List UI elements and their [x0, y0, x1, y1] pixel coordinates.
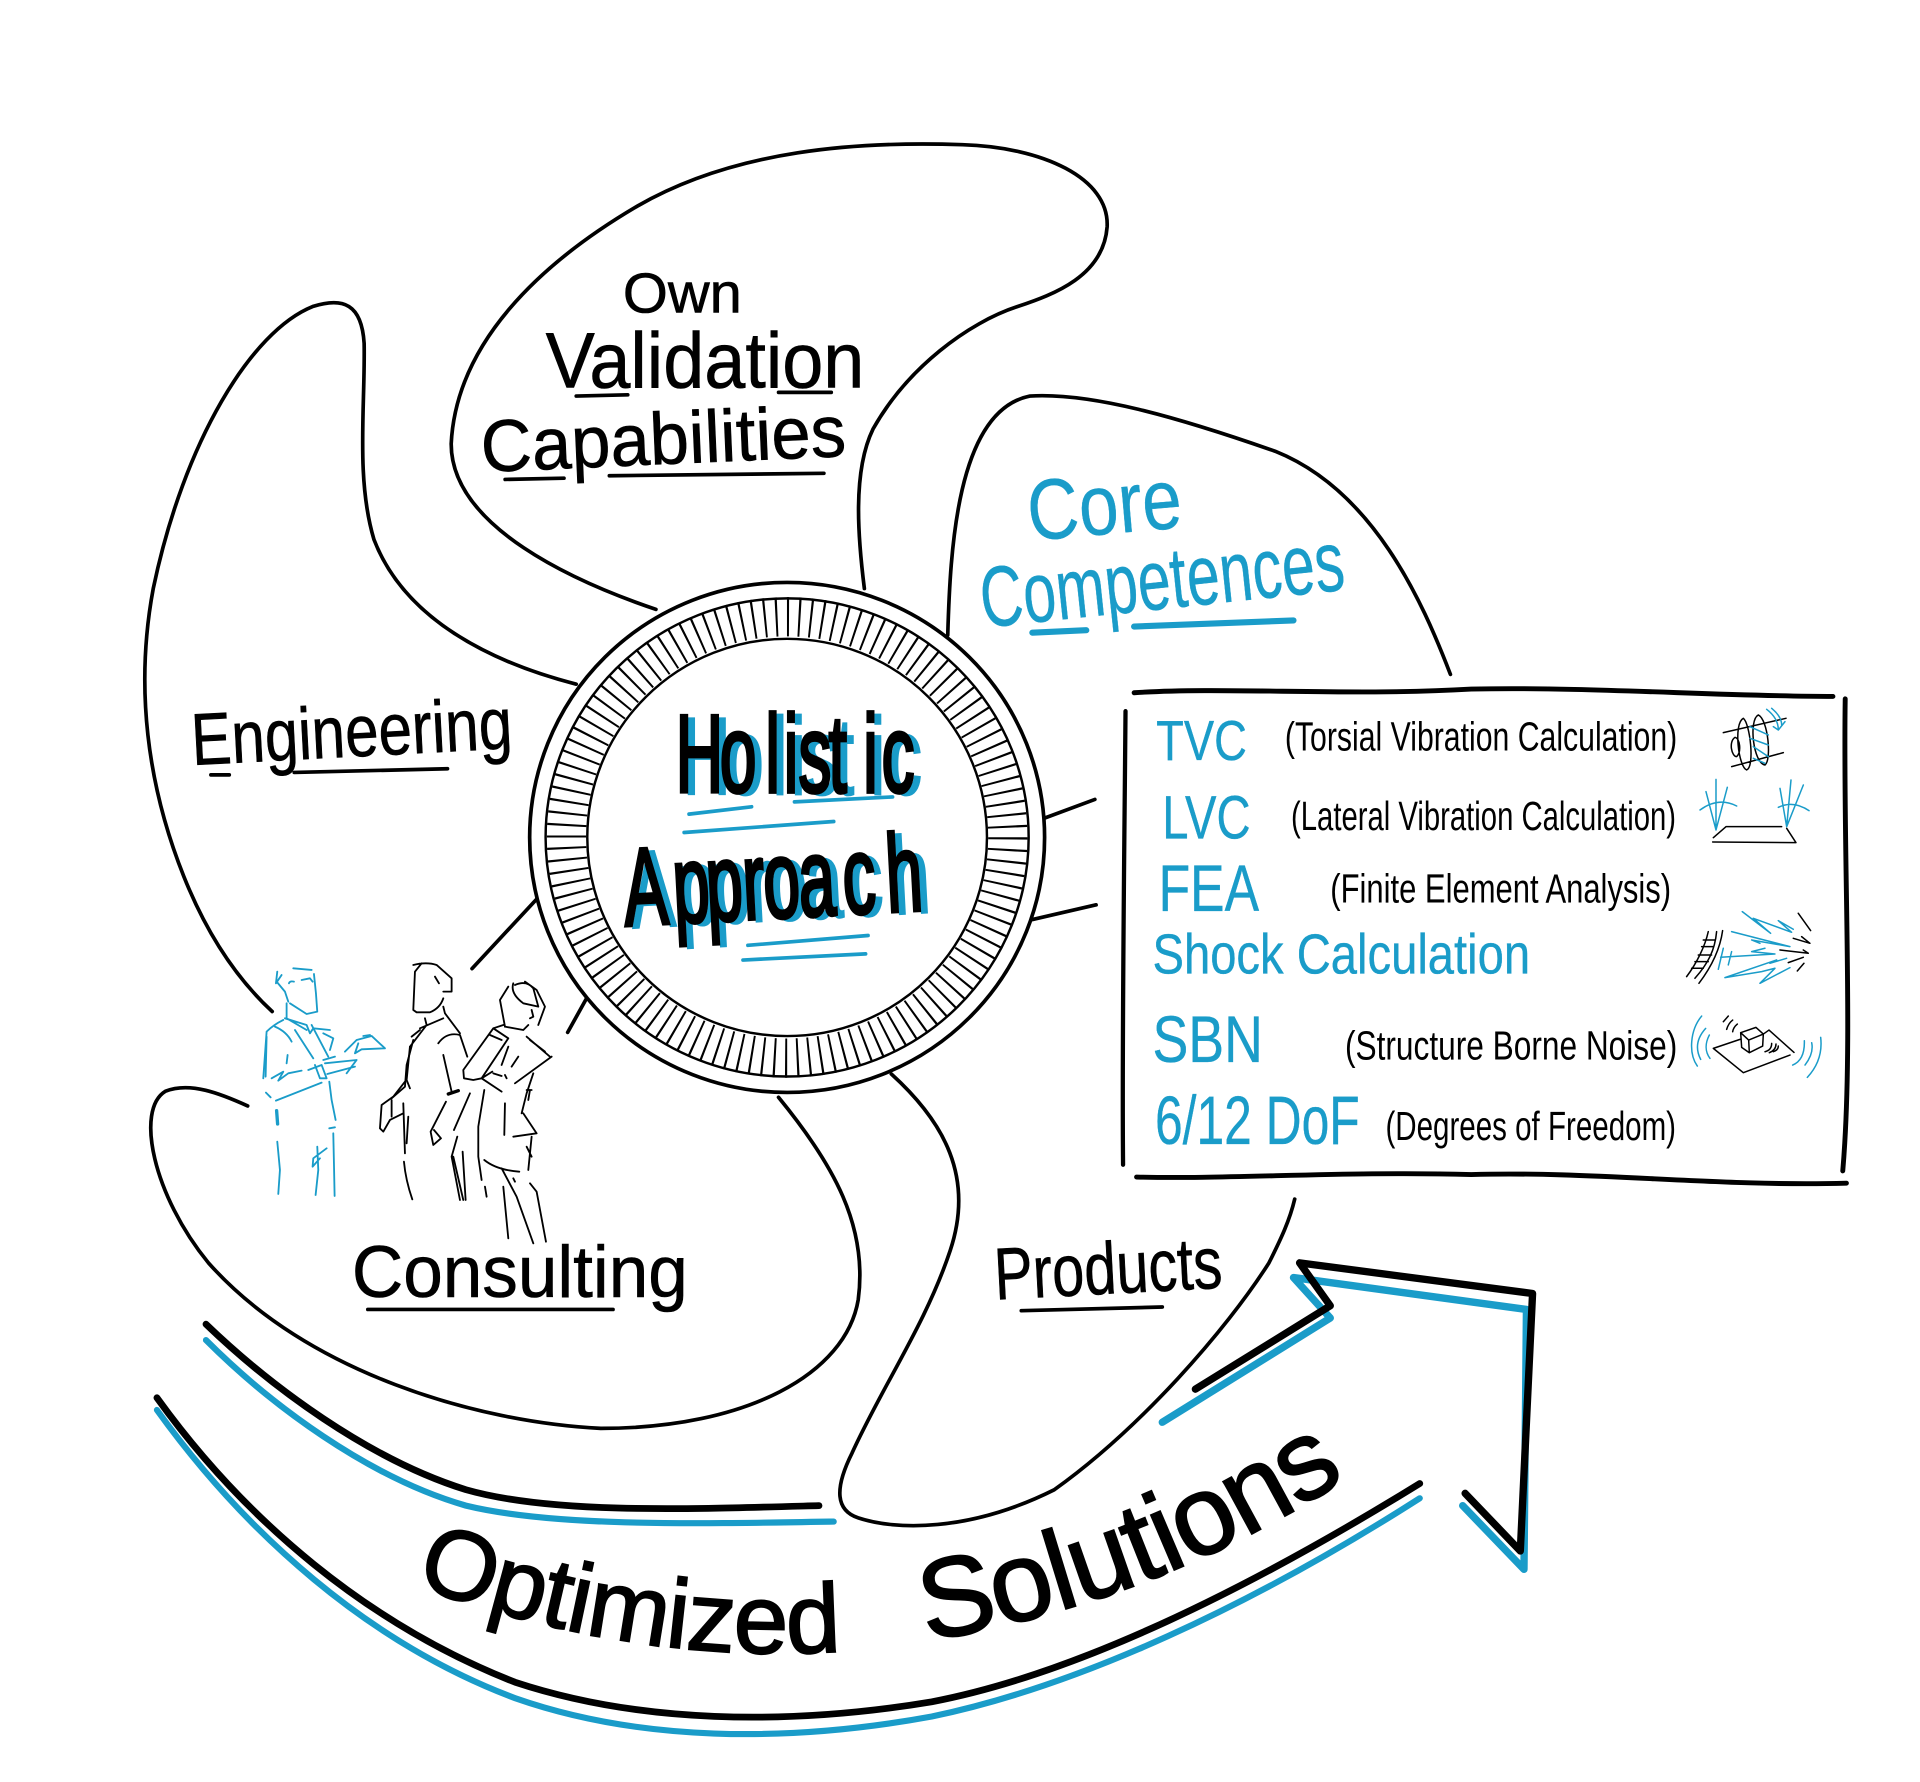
text: Own: Own: [623, 262, 742, 325]
heading: Holistic: Holistic: [683, 696, 922, 819]
figure: blue presenter: [263, 968, 385, 1196]
row: TVC: (Torsial Vibration Calculation): [1285, 713, 1677, 759]
panel: products blade: [840, 1074, 1295, 1526]
icon: lateral vibration mount: [1700, 779, 1809, 843]
arrow: optimized solutions sweeping arrow: [154, 1259, 1536, 1738]
row: FEA: [1159, 852, 1671, 926]
row: FEA: FEA: [1159, 852, 1260, 926]
row: SBN: SBN: [1152, 1003, 1263, 1077]
icon: structure borne noise plate: [1692, 1016, 1821, 1077]
text: Consulting: Consulting: [352, 1230, 688, 1313]
row: FEA: (Finite Element Analysis): [1330, 865, 1671, 911]
heading: Approach: Approach: [620, 812, 926, 950]
heading: Competences: Competences: [975, 513, 1349, 647]
text: Optimized: Optimized: [426, 1530, 836, 1656]
row: SBN: [1152, 1003, 1677, 1077]
icon: torsional shaft: [1723, 708, 1786, 770]
heading: Approach: Approach: [628, 814, 933, 952]
panel: engineering blade: [145, 303, 576, 1012]
text: Solutions: Solutions: [922, 1436, 1339, 1638]
panel: consulting blade: [151, 899, 860, 1428]
row: LVC: LVC: [1162, 784, 1251, 852]
text: Products: Products: [992, 1221, 1224, 1316]
row: SBN: (Structure Borne Noise): [1345, 1022, 1677, 1068]
heading: Core: Core: [1023, 451, 1185, 560]
heading: Holistic: Holistic: [676, 694, 915, 816]
icon: shock impact: [1687, 912, 1811, 983]
figure: black man: [380, 963, 470, 1200]
row: TVC: TVC: [1156, 709, 1247, 772]
row: TVC: [1156, 709, 1677, 772]
row: LVC: (Lateral Vibration Calculation): [1291, 793, 1676, 839]
hub: holistic approach gear ring: [530, 582, 1045, 1092]
row: 6/12 DoF: (Degrees of Freedom): [1385, 1103, 1676, 1149]
row: 6/12 DoF: 6/12 DoF: [1155, 1082, 1360, 1159]
figure: black woman: [463, 982, 552, 1243]
text: Validation: Validation: [546, 316, 864, 404]
panel: own validation capabilities blade: [451, 144, 1107, 609]
illustration: three people in discussion: [263, 963, 552, 1243]
panel: core competences blade: [948, 396, 1450, 920]
text: Engineering: Engineering: [189, 681, 514, 781]
row: LVC: [1162, 784, 1676, 852]
panel: core competences list box: [1123, 689, 1848, 1184]
text: Capabilities: Capabilities: [479, 389, 848, 488]
row: Shock Calculation: Shock Calculation: [1152, 923, 1530, 986]
row: 6/12 DoF: [1155, 1082, 1676, 1159]
